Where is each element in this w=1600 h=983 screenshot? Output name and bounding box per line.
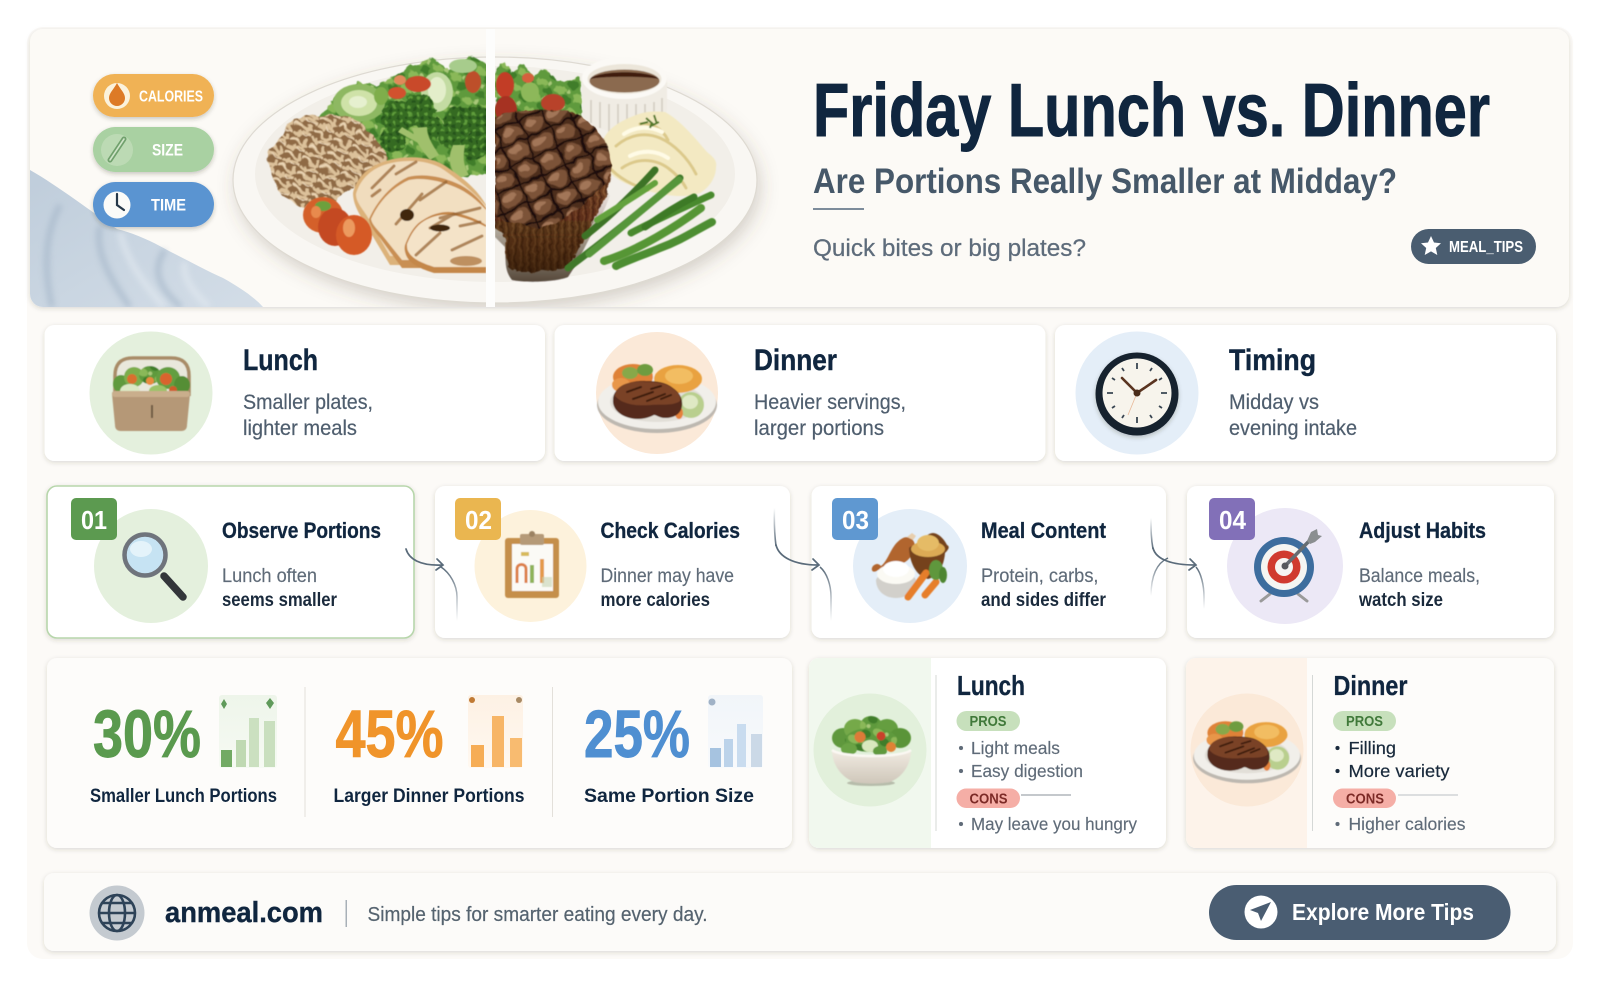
food: dinner half — [495, 57, 716, 282]
pill: calories: CALORIES — [139, 88, 203, 106]
label: larger dinner: Larger Dinner Portions — [334, 785, 525, 807]
text: timing description: Midday vs — [1229, 391, 1319, 414]
tag: pros — [956, 711, 1020, 731]
stat: 25 percent — [584, 695, 763, 807]
chart: lunch bars — [219, 695, 277, 768]
button: explore more tips: Explore More Tips — [1292, 899, 1474, 925]
text: lunch description: lighter meals — [243, 417, 357, 440]
panel: footer — [44, 873, 1556, 951]
text: dinner heading: Dinner — [754, 344, 837, 377]
stat: 45 percent — [334, 695, 525, 807]
text: dinner description — [754, 391, 906, 440]
chart: dinner bars — [468, 695, 523, 768]
badge: 02 — [455, 498, 501, 540]
badge: 04: 04 — [1219, 505, 1247, 535]
arrow: step 2 to 3 — [774, 508, 831, 621]
tag: pros: PROS — [1346, 714, 1383, 730]
list: lunch pros: Light meals — [971, 738, 1060, 758]
card: lunch — [44, 325, 545, 461]
panel: lunch pros and cons — [809, 658, 1166, 848]
text: step 04 description — [1358, 566, 1480, 611]
divider: white split — [486, 29, 495, 307]
text: observe portions: Observe Portions — [222, 518, 381, 543]
tag: cons: CONS — [1346, 792, 1384, 808]
illustration: split plate — [233, 55, 757, 303]
text: step 03 description: Protein, carbs, — [981, 566, 1098, 587]
tag: cons — [1333, 788, 1458, 808]
badge: 03: 03 — [842, 505, 869, 535]
text: step 03 description — [981, 566, 1107, 611]
text: step 01 description: seems smaller — [222, 590, 338, 611]
text: step 02 description: more calories — [600, 590, 710, 611]
tag: pros: PROS — [970, 714, 1007, 730]
text: step 04 description: Balance meals, — [1359, 566, 1480, 587]
heading: dinner: Dinner — [1334, 670, 1408, 701]
text: timing description — [1229, 391, 1357, 440]
badge: meal tips — [1411, 229, 1536, 264]
arrow: step 3 to 4 — [1151, 518, 1204, 609]
subtitle: Are Portions Really Smaller at Midday? — [813, 162, 1397, 201]
label: same portion: Same Portion Size — [584, 785, 754, 807]
pill: calories — [93, 74, 214, 117]
icon: clipboard — [505, 531, 559, 598]
text: step 01 description — [222, 566, 338, 611]
tag: cons: CONS — [970, 792, 1008, 808]
tag: cons — [956, 788, 1071, 808]
text: dinner description: larger portions — [754, 417, 884, 440]
pill: size — [93, 127, 214, 172]
icon: dinner plate small — [1193, 721, 1301, 783]
icon: napkin — [30, 170, 263, 307]
pill: time: TIME — [151, 196, 186, 214]
food: lunch half — [270, 55, 495, 273]
badge: 04 — [1209, 498, 1255, 540]
step 03: meal content — [812, 486, 1166, 638]
stat: 45 percent: 45% — [336, 697, 444, 772]
badge: 01: 01 — [81, 505, 107, 535]
text: step 01 description: Lunch often — [222, 566, 317, 587]
tagline: Quick bites or big plates? — [813, 235, 1086, 262]
panel: statistics — [47, 658, 792, 848]
list: dinner pros — [1336, 738, 1450, 781]
stat: 30 percent: 30% — [93, 697, 201, 772]
step 01: observe portions — [47, 486, 414, 638]
list: lunch pros — [959, 738, 1083, 781]
text: step 04 description: watch size — [1358, 590, 1443, 611]
icon: meal food — [872, 533, 949, 598]
chart: same size bars — [708, 695, 763, 768]
heading: lunch: Lunch — [957, 670, 1025, 701]
icon: globe — [90, 886, 144, 940]
tag: pros — [1333, 711, 1396, 731]
card: timing — [1055, 325, 1556, 461]
text: dinner description: Heavier servings, — [754, 391, 906, 414]
text: lunch description: Smaller plates, — [243, 391, 373, 414]
list: lunch cons: May leave you hungry — [971, 814, 1137, 834]
list: dinner cons: Higher calories — [1348, 814, 1466, 834]
pill: size: SIZE — [152, 142, 183, 160]
text: check calories: Check Calories — [600, 518, 740, 543]
icon: lunch basket — [112, 358, 190, 431]
text: footer tagline: Simple tips for smarter eating every day. — [368, 904, 708, 926]
list: dinner pros: Filling — [1348, 738, 1396, 758]
text: step 03 description: and sides differ — [981, 590, 1107, 611]
panel: dinner pros and cons — [1186, 658, 1554, 848]
stat: 30 percent — [90, 695, 277, 807]
list: dinner pros: More variety — [1348, 761, 1450, 781]
text: meal content: Meal Content — [981, 518, 1107, 543]
panel: hero — [30, 29, 1569, 307]
text: step 02 description: Dinner may have — [600, 566, 734, 587]
badge: 01 — [71, 498, 117, 540]
text: timing description: evening intake — [1229, 417, 1357, 440]
card: dinner — [554, 325, 1046, 461]
text: website: anmeal.com — [165, 897, 323, 929]
step 04: adjust habits — [1187, 486, 1554, 638]
badge: meal tips: MEAL_TIPS — [1449, 239, 1523, 256]
text: step 02 description — [600, 566, 734, 611]
icon: target — [1254, 529, 1322, 601]
step 02: check calories — [435, 486, 790, 638]
stat: 25 percent: 25% — [584, 697, 690, 772]
text: lunch heading: Lunch — [243, 344, 318, 377]
icon: dinner plate — [597, 364, 717, 433]
badge: 02: 02 — [465, 505, 492, 535]
icon: salad bowl — [832, 716, 911, 786]
text: adjust habits: Adjust Habits — [1359, 518, 1486, 543]
label: smaller lunch: Smaller Lunch Portions — [90, 785, 277, 807]
badge: 03 — [832, 498, 878, 540]
arrow: step 1 to 2 — [406, 549, 457, 621]
text: lunch description — [243, 391, 373, 440]
list: lunch pros: Easy digestion — [971, 761, 1083, 781]
text: timing heading: Timing — [1229, 344, 1316, 377]
pill: time — [93, 182, 214, 227]
icon: clock — [1096, 352, 1178, 436]
icon: magnifier — [124, 534, 183, 597]
button: explore more tips — [1209, 885, 1510, 940]
